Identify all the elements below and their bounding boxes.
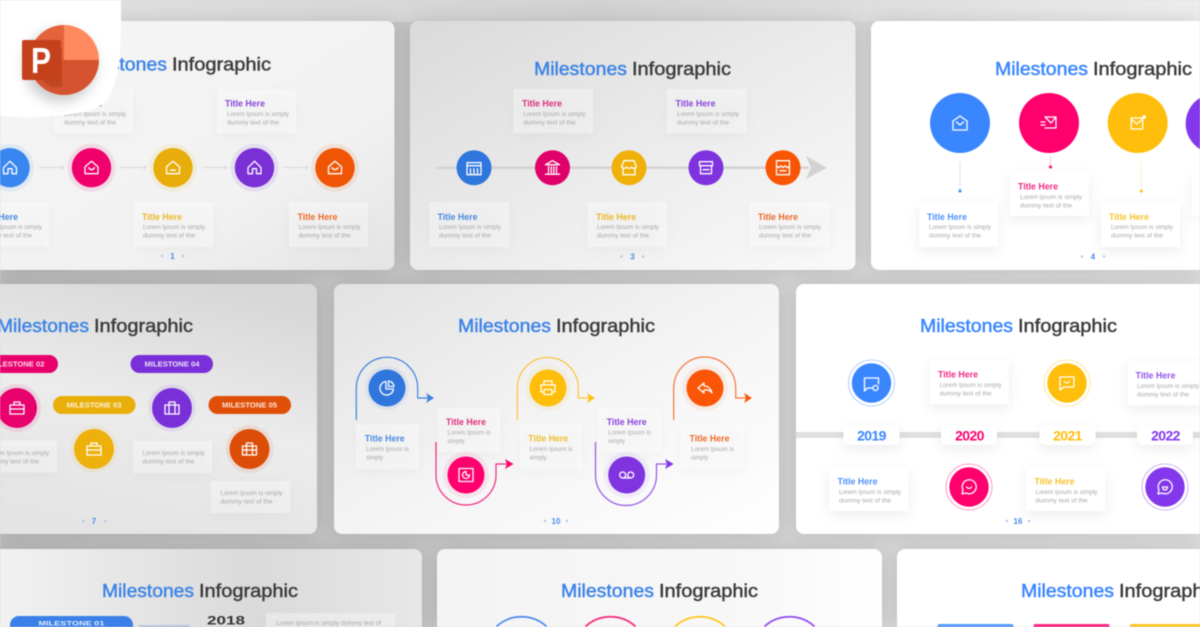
panel: slide 3 arrow timeline (410, 21, 856, 270)
slide 1 card yellow (134, 202, 213, 247)
panel: slide 1 house timeline (0, 21, 394, 270)
slide 7 text card 2 (0, 440, 57, 472)
icon: yellow store (612, 150, 646, 185)
blue block (938, 624, 1014, 627)
pill milestone 02 (0, 355, 58, 373)
slide 4 title: Milestones (995, 59, 1088, 79)
slide 1 card purple: dummy text of the (227, 120, 280, 126)
icon: pink house (68, 144, 116, 192)
slide 16 card pink: Lorem Ipsum is simply (940, 382, 1002, 389)
slide 16 card purple: Title Here (1136, 370, 1176, 380)
year 2019: 2019 (857, 428, 887, 444)
pill milestone 05 (208, 396, 291, 414)
icon: purple voicemail (604, 452, 650, 498)
slide 1 card blue (0, 202, 49, 247)
icon: purple house (230, 144, 278, 192)
panel: slide 10 looping path (334, 284, 779, 534)
slide 3 title: Infographic (632, 59, 731, 79)
slide 3 card pink: dummy text of the (524, 120, 576, 126)
slide 16 card yellow: Lorem Ipsum is simply (1036, 489, 1098, 496)
slide 7 page number: 7 (92, 517, 97, 526)
pill milestone 03 (53, 396, 136, 414)
slide 4 card blue: dummy text of the (929, 232, 982, 240)
slide 7 text card 5: Lorem Ipsum is simply (220, 490, 283, 497)
slide 4 card blue (919, 202, 998, 247)
slide 3 card blue: Title Here (438, 212, 478, 222)
arrow to 2018 (139, 625, 190, 627)
slide 16 card pink (930, 360, 1009, 404)
slide 4 card pink: Lorem Ipsum is simply (1020, 194, 1083, 201)
icon: pink bank (535, 150, 570, 185)
pink loop arrow (436, 442, 514, 505)
slide 1 page number (161, 252, 184, 261)
slide 1 title: Milestones (74, 54, 167, 74)
slide 3 card orange: dummy text of the (759, 232, 812, 240)
bottom middle title: Infographic (659, 581, 758, 601)
slide 10 card orange (681, 424, 744, 469)
year 2021 (1040, 426, 1096, 445)
slide 1 card yellow: dummy text of the (143, 232, 196, 240)
icon: orange briefcase (226, 425, 274, 473)
PowerPoint badge (0, 0, 121, 117)
slide 10 card pink: simply (448, 438, 465, 445)
slide 10 card pink (438, 408, 500, 452)
slide 10 card yellow: simply (530, 454, 547, 462)
slide 16 card blue: dummy text of the (839, 498, 892, 504)
slide 10 card yellow (520, 424, 582, 469)
slide 3 card pink (514, 89, 593, 133)
slide 10 card orange: Lorem Ipsum is (691, 446, 734, 453)
slide 1 card pink: Title Here (62, 98, 102, 108)
slide 16 card blue: Title Here (838, 476, 878, 486)
slide 10 card orange: simply (691, 454, 709, 462)
panel: bottom slide left (0, 549, 422, 627)
slide 16 card purple (1128, 361, 1200, 406)
slide 10 card orange: Title Here (690, 434, 730, 444)
slide 10 card blue: Lorem Ipsum is (366, 446, 409, 453)
icon: orange reply (682, 365, 728, 411)
yellow loop arrow (517, 357, 595, 420)
panel: slide 16 year timeline (796, 284, 1200, 534)
slide 1 card yellow: Title Here (142, 212, 182, 222)
year 2020 (941, 426, 997, 445)
slide 3 card purple: Title Here (676, 98, 716, 108)
yellow ring (675, 617, 725, 626)
slide 1 card orange (289, 202, 368, 247)
panel: slide 7 milestone pills (0, 284, 317, 534)
icon: pink mail circle (1019, 93, 1079, 153)
slide 10 card pink: Lorem Ipsum is (448, 430, 490, 436)
icon: purple shop (688, 150, 724, 185)
slide 10 card purple: Lorem Ipsum is (608, 430, 651, 436)
icon: blue pie chart (365, 366, 409, 410)
pink ring (586, 617, 636, 626)
slide 3 card blue: dummy text of the (439, 232, 492, 240)
icon: blue chat settings (848, 360, 894, 406)
icon: blue house (0, 144, 34, 192)
bottom left text card (266, 613, 395, 627)
slide 3 title: Milestones (534, 59, 627, 79)
slide 3 card orange: Title Here (758, 212, 798, 222)
panel: slide 4 large circles (871, 21, 1200, 270)
slide 7 title (0, 316, 193, 336)
slide 4 card pink (1010, 172, 1089, 216)
slide 10 card yellow: Title Here (528, 434, 568, 444)
slide 7 text card 4: Lorem Ipsum is simply (142, 450, 205, 457)
slide 1 card purple: Lorem Ipsum is simply (227, 111, 290, 118)
slide 3 card purple (667, 89, 746, 133)
icon: yellow chat (1044, 360, 1090, 406)
slide 4 card yellow: Title Here (1109, 212, 1149, 222)
bottom right title (1021, 581, 1200, 601)
panel: bottom slide right (897, 549, 1200, 627)
slide 1 title (74, 54, 271, 74)
blue dotted connector (958, 162, 962, 192)
slide 7 text card 4: dummy text of the (142, 458, 195, 466)
blue loop arrow (356, 357, 434, 420)
icon: PowerPoint logo: P (31, 40, 51, 81)
year 2019 (844, 426, 900, 445)
slide 3 card purple: Lorem Ipsum is simply (677, 111, 740, 118)
slide 16 card pink: dummy text of the (940, 390, 992, 398)
slide 10 title (458, 316, 655, 336)
slide 16 card purple: dummy text of the (1137, 392, 1190, 398)
pill milestone 04: MILESTONE 04 (144, 362, 200, 368)
icon: purple chat bubble (1142, 464, 1188, 510)
slide 3 card blue: Lorem Ipsum is simply (439, 224, 502, 231)
slide 10 card pink: Title Here (446, 417, 486, 427)
slide 1 card purple: Title Here (225, 98, 265, 108)
bottom right title: Milestones (1021, 581, 1114, 601)
slide 16 card purple: Lorem Ipsum is simply (1137, 383, 1200, 390)
icon: orange shop (766, 150, 800, 185)
year 2022 (1137, 426, 1193, 445)
slide 10 card purple (598, 408, 661, 452)
slide 16 card yellow: Title Here (1034, 476, 1074, 486)
slide 3 card yellow: Title Here (596, 212, 636, 222)
slide 3 card orange: Lorem Ipsum is simply (759, 224, 822, 231)
slide 10 card blue: Title Here (365, 434, 405, 444)
slide 3 card purple: dummy text of the (677, 120, 730, 126)
slide 16 title: Milestones (920, 316, 1013, 336)
slide 16 card pink: Title Here (938, 370, 978, 380)
slide 10 card purple: simply (608, 438, 626, 445)
slide 16 title (920, 316, 1117, 336)
icon: yellow house (149, 144, 197, 192)
slide 3 arrow line (437, 156, 827, 179)
year 2020: 2020 (955, 428, 985, 444)
slide 16 page number (1006, 517, 1030, 526)
slide 1 title: Infographic (172, 54, 271, 74)
slide 10 page number: 10 (552, 517, 561, 526)
yellow dotted connector (1140, 161, 1143, 192)
icon: orange house (311, 144, 359, 192)
slide 1 card orange: Title Here (298, 212, 338, 222)
timeline band (796, 432, 1200, 438)
slide 4 card yellow: dummy text of the (1111, 232, 1164, 240)
slide 3 card yellow (588, 202, 667, 247)
slide 3 card yellow: Lorem Ipsum is simply (597, 224, 660, 231)
slide 7 text card 5: dummy text of the (220, 498, 273, 506)
bottom left title (102, 581, 298, 601)
bottom middle title: Milestones (561, 581, 654, 601)
slide 7 page number (82, 517, 107, 526)
purple circle (1186, 98, 1200, 149)
slide 1 card pink (54, 89, 133, 133)
slide 1 card yellow: Lorem Ipsum is simply (143, 224, 206, 231)
year 2022: 2022 (1151, 428, 1181, 444)
slide 4 card yellow: Lorem Ipsum is simply (1111, 224, 1174, 231)
blue ring (496, 617, 546, 626)
slide 16 card yellow: dummy text of the (1036, 498, 1088, 504)
slide 16 title: Infographic (1018, 316, 1117, 336)
slide 4 title: Infographic (1093, 59, 1192, 79)
slide 4 card pink: dummy text of the (1020, 202, 1073, 210)
purple ring (764, 617, 814, 626)
slide 16 card blue (829, 467, 908, 511)
icon: yellow mail circle (1108, 93, 1168, 153)
slide 10 card blue: simply (366, 454, 384, 462)
slide 7 title: Infographic (94, 316, 193, 336)
slide 3 card pink: Lorem Ipsum is simply (524, 111, 586, 118)
bottom left title: Milestones (102, 581, 194, 601)
icon: yellow printer (525, 365, 571, 411)
purple loop arrow (596, 442, 674, 505)
slide 10 title: Infographic (556, 316, 655, 336)
slide 7 text card 4 (133, 441, 212, 473)
slide 3 card blue (430, 202, 509, 247)
slide 3 title (534, 59, 731, 79)
icon: purple briefcase (148, 384, 196, 432)
slide 4 card blue: Lorem Ipsum is simply (929, 224, 992, 231)
slide 3 card pink: Title Here (522, 98, 562, 108)
slide 1 card orange: dummy text of the (298, 232, 351, 240)
slide 16 card yellow (1026, 467, 1106, 511)
slide 1 card orange: Lorem Ipsum is simply (298, 224, 361, 231)
slide 1 card pink: Lorem Ipsum is simply (64, 111, 127, 118)
slide 4 card blue: Title Here (927, 212, 967, 222)
orange loop arrow (674, 357, 752, 420)
slide 3 page number: 3 (630, 252, 635, 262)
slide 4 card pink: Title Here (1018, 182, 1058, 192)
slide 1 connector arrows (39, 166, 308, 170)
slide 4 title (995, 59, 1192, 79)
pill milestone 01 (10, 616, 133, 627)
slide 10 page number (544, 517, 568, 526)
bottom left title: Infographic (199, 581, 298, 601)
icon: pink presentation (443, 452, 489, 498)
slide 3 page number (620, 252, 644, 262)
icon: yellow briefcase (70, 425, 118, 473)
slide 16 page number: 16 (1014, 517, 1023, 526)
slide 3 card yellow: dummy text of the (597, 232, 650, 240)
slide 10 card yellow: Lorem Ipsum is (530, 446, 572, 453)
pill milestone 05: MILESTONE 05 (222, 402, 277, 410)
icon: pink briefcase (0, 384, 41, 432)
slide 1 page number: 1 (170, 252, 175, 261)
slide 10 card purple: Title Here (607, 417, 647, 427)
slide 10 card blue (356, 424, 419, 469)
pill milestone 04 (130, 355, 213, 373)
slide 4 card yellow (1101, 202, 1180, 247)
bottom middle title (561, 581, 758, 601)
panel: bottom slide middle (437, 549, 882, 627)
slide 4 page number: 4 (1091, 252, 1096, 262)
icon: blue mail circle (930, 93, 990, 153)
icon: blue bank (456, 150, 492, 185)
pink dotted connector (1049, 156, 1052, 168)
slide 7 text card 5 (211, 481, 290, 513)
slide 10 title: Milestones (458, 316, 551, 336)
pink block (1034, 624, 1110, 627)
slide 16 card blue: Lorem Ipsum is simply (839, 489, 902, 496)
bottom left text card: Lorem Ipsum is simply dummy text of (276, 620, 381, 627)
pill milestone 03: MILESTONE 03 (66, 402, 122, 410)
slide 1 card purple (217, 89, 296, 133)
slide 4 page number (1081, 252, 1105, 262)
yellow block (1130, 624, 1200, 627)
slide 4 card purple (1192, 172, 1200, 216)
year 2021: 2021 (1053, 428, 1083, 444)
slide 3 card orange (750, 202, 829, 247)
icon: pink chat bubble (946, 464, 992, 510)
slide 1 card pink: dummy text of the (64, 120, 117, 126)
